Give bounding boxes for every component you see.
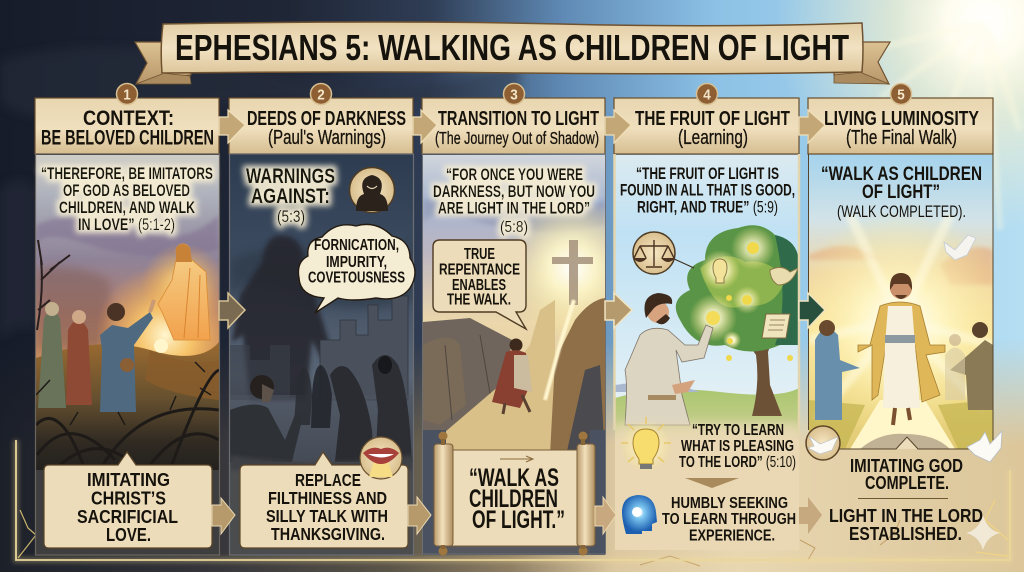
panel edge xyxy=(808,154,993,449)
title text: EPHESIANS 5: WALKING AS CHILDREN OF LIGHT xyxy=(175,27,849,68)
learning summary xyxy=(662,495,796,544)
panel 1: context xyxy=(35,84,235,555)
icon: glowing brain head xyxy=(622,495,657,534)
heading: (The Final Walk) xyxy=(846,127,957,149)
caption box: panel 2: FILTHINESS AND xyxy=(268,488,387,508)
scene: tree and learner xyxy=(615,155,799,550)
scripture quote xyxy=(620,165,795,216)
result text: IMITATING GOD xyxy=(850,456,963,476)
arrow: header 4 to 5 xyxy=(799,110,825,143)
learner figure xyxy=(625,293,713,425)
header xyxy=(614,98,799,154)
scripture quote: DARKNESS, BUT NOW YOU xyxy=(433,183,595,201)
callout: true repentance xyxy=(433,240,526,329)
icon: mouth speaking xyxy=(360,437,402,479)
heading xyxy=(247,107,406,149)
step number 5 xyxy=(890,84,912,104)
heading: TRANSITION TO LIGHT xyxy=(438,107,599,130)
callout: true repentance: TRUE xyxy=(464,246,495,263)
step number 2: 2 xyxy=(317,86,325,104)
scripture quote: CHILDREN, AND WALK xyxy=(59,199,195,217)
notch above text xyxy=(896,436,918,449)
down arrow xyxy=(685,478,739,488)
callout: true repentance: REPENTANCE xyxy=(439,262,520,278)
heading xyxy=(41,107,214,150)
panel 4: the fruit of light xyxy=(614,84,799,550)
scene: dark city xyxy=(230,155,413,555)
scene: radiant walk xyxy=(809,155,992,448)
onlookers xyxy=(815,320,993,420)
icon: shadow person xyxy=(350,168,394,212)
panel edge xyxy=(422,154,606,554)
scripture quote: OF LIGHT” xyxy=(862,182,940,203)
panel 5: living luminosity xyxy=(805,82,1002,550)
panel 3: transition to light xyxy=(421,82,606,556)
heading: (Paul's Warnings) xyxy=(268,127,386,149)
sparkle xyxy=(966,515,1000,550)
callout: true repentance: ENABLES xyxy=(452,277,506,294)
cross xyxy=(552,240,593,305)
shadow giant xyxy=(232,236,330,400)
glowing path xyxy=(850,400,955,449)
learning quote: TO THE LORD” (5:10) xyxy=(679,454,796,471)
thorns and dead tree xyxy=(36,240,219,470)
scripture quote: “FOR ONCE YOU WERE xyxy=(446,166,583,184)
scripture quote xyxy=(41,165,213,234)
walker xyxy=(492,338,532,414)
panel 2: deeds of darkness xyxy=(229,84,415,555)
arrow: bottom 2 to 3 xyxy=(408,497,431,534)
caption box: panel 2: SILLY TALK WITH xyxy=(266,506,388,526)
arrow: bottom 3 to 4 xyxy=(595,497,616,534)
scripture quote xyxy=(433,166,595,236)
warnings heading: (5:3) xyxy=(277,207,305,226)
scripture quote: RIGHT, AND TRUE” (5:9) xyxy=(637,198,778,216)
mourning figures xyxy=(230,355,412,470)
arrow: bottom 1 to 2 xyxy=(212,498,235,534)
step number 4: 4 xyxy=(703,86,711,104)
left cliff xyxy=(423,318,512,440)
arrow: middle 1 to 2 xyxy=(219,293,245,328)
arrow: header 3 to 4 xyxy=(605,110,631,143)
scripture quote: “THE FRUIT OF LIGHT IS xyxy=(636,165,779,183)
speech bubble: sins: FORNICATION, xyxy=(314,237,399,254)
Jesus figure glowing xyxy=(146,244,219,340)
scripture quote: OF GOD AS BELOVED xyxy=(63,182,190,200)
learning quote: “TRY TO LEARN xyxy=(692,422,784,439)
speech bubble: sins: IMPURITY, xyxy=(326,254,387,271)
ruined city xyxy=(320,296,408,400)
left ribbon tail xyxy=(135,42,191,84)
icon: flying dove xyxy=(944,235,976,260)
icon: scales xyxy=(633,232,694,274)
scroll: walk as children of light: CHILDREN xyxy=(469,485,558,513)
step number 1: 1 xyxy=(123,86,131,104)
arrow: middle 4 to 5 xyxy=(799,293,825,328)
scripture quote xyxy=(821,164,982,221)
heading: THE FRUIT OF LIGHT xyxy=(635,107,790,130)
scroll: walk as children of light: OF LIGHT.” xyxy=(472,506,565,534)
header xyxy=(229,98,413,154)
heading xyxy=(635,107,790,149)
result text: LIGHT IN THE LORD xyxy=(829,505,983,526)
icon: scroll xyxy=(762,314,790,338)
caption box: panel 1 xyxy=(44,452,212,548)
icon: dove right xyxy=(967,431,1002,462)
step number 5: 5 xyxy=(897,86,905,104)
heading: CONTEXT: xyxy=(83,107,174,130)
learning summary: HUMBLY SEEKING xyxy=(671,495,788,512)
header xyxy=(808,98,993,154)
header xyxy=(35,98,219,154)
caption box: panel 2 xyxy=(240,452,408,548)
title banner xyxy=(135,22,890,84)
arrow: header 2 to 3 xyxy=(413,110,437,143)
step number 3 xyxy=(504,84,524,104)
step number 3: 3 xyxy=(510,86,518,104)
scripture quote: “THEREFORE, BE IMITATORS xyxy=(41,165,213,183)
panel edge xyxy=(230,154,414,555)
step number 1 xyxy=(116,84,138,104)
warnings heading xyxy=(246,165,335,226)
scroll: walk as children of light: “WALK AS xyxy=(469,464,559,492)
scene: sunset hills xyxy=(35,155,235,555)
arrow: bottom 4 to 5 xyxy=(799,497,822,534)
heading xyxy=(435,107,599,148)
caption box: panel 1: SACRIFICIAL xyxy=(77,507,178,527)
glowing bottom frame xyxy=(16,440,1010,560)
scroll: walk as children of light xyxy=(434,432,595,556)
panel edge xyxy=(36,154,220,555)
arrow: header 1 to 2 xyxy=(219,110,245,143)
caption box: panel 1: LOVE. xyxy=(106,525,151,545)
warnings heading: AGAINST: xyxy=(251,185,330,208)
heading: (The Journey Out of Shadow) xyxy=(435,128,599,148)
heading: LIVING LUMINOSITY xyxy=(824,107,979,130)
heading: BE BELOVED CHILDREN xyxy=(41,126,214,150)
apple tree xyxy=(676,225,799,416)
Jesus walking xyxy=(858,273,945,425)
icon: dove badge xyxy=(806,426,840,460)
right cliff xyxy=(550,298,605,450)
scripture quote: “WALK AS CHILDREN xyxy=(821,164,982,185)
ribbon folds xyxy=(136,72,889,84)
scripture quote: (5:8) xyxy=(500,219,528,236)
callout: true repentance: THE WALK. xyxy=(447,292,511,308)
result text: ESTABLISHED. xyxy=(849,523,962,544)
warnings heading: WARNINGS xyxy=(246,165,335,188)
panel edge xyxy=(614,154,799,440)
heading: (Learning) xyxy=(678,127,748,149)
three onlookers xyxy=(38,300,154,412)
scripture quote: ARE LIGHT IN THE LORD” xyxy=(438,200,590,218)
learning summary: EXPERIENCE. xyxy=(689,528,775,544)
step number 4 xyxy=(696,84,718,104)
icon: heart xyxy=(770,267,798,285)
scene: cliff and cross xyxy=(423,155,605,555)
learning quote xyxy=(679,422,796,471)
scripture quote: (WALK COMPLETED). xyxy=(837,202,966,221)
icon: bulb in tree xyxy=(700,250,740,290)
caption box: panel 2: THANKSGIVING. xyxy=(271,524,385,544)
icon: light bulb xyxy=(620,417,672,472)
result text xyxy=(829,456,983,544)
caption box: panel 2: REPLACE xyxy=(295,470,361,490)
heading xyxy=(824,107,979,149)
result text: COMPLETE. xyxy=(865,473,949,493)
scripture quote: FOUND IN ALL THAT IS GOOD, xyxy=(620,182,795,200)
speech bubble: sins: COVETOUSNESS xyxy=(308,270,405,286)
caption box: panel 1: IMITATING xyxy=(87,470,170,490)
speech bubble: sins xyxy=(298,224,415,313)
learning summary: TO LEARN THROUGH xyxy=(662,511,796,528)
header xyxy=(422,98,605,154)
arrow: middle 3 to 4 xyxy=(605,293,632,328)
banner body xyxy=(161,22,863,74)
scripture quote: IN LOVE” (5:1-2) xyxy=(78,216,175,234)
learning quote: WHAT IS PLEASING xyxy=(681,438,794,455)
step number 2 xyxy=(310,84,332,104)
heading: DEEDS OF DARKNESS xyxy=(247,107,406,130)
right ribbon tail xyxy=(834,42,890,84)
caption box: panel 1: CHRIST’S xyxy=(91,488,166,508)
